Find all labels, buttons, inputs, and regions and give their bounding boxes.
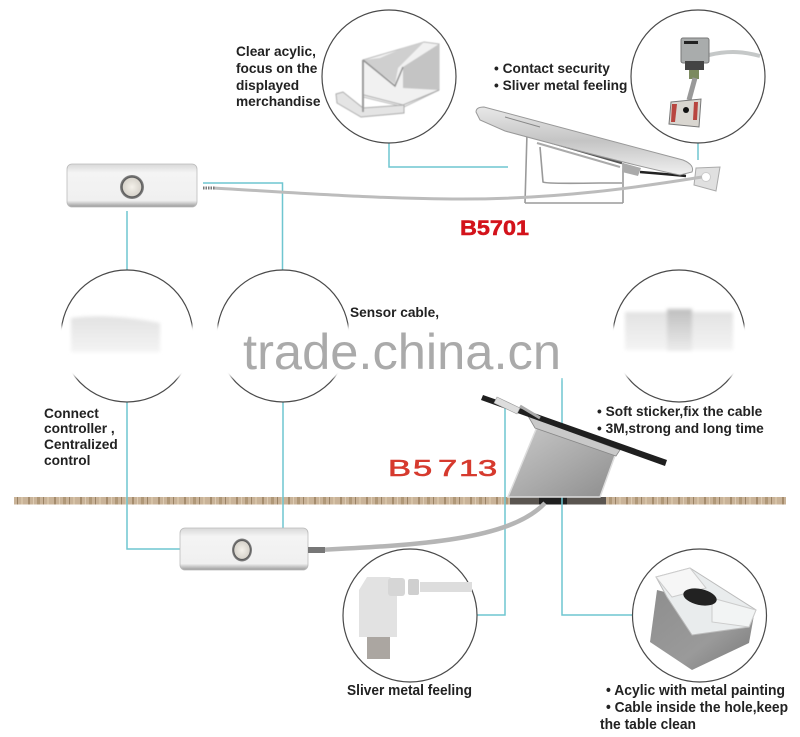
- circle: clear acrylic holder: [322, 10, 456, 143]
- label: clear acrylic: merchandise: [236, 94, 321, 109]
- label: contact security: • Contact security: [494, 61, 610, 76]
- label: connect controller: control: [44, 453, 90, 468]
- model label B5713: B5713: [388, 456, 497, 481]
- phone on acrylic stand B5701: [476, 107, 720, 203]
- circle: sensor cable detail: [217, 270, 349, 402]
- watermark: trade.china.cn: [243, 324, 561, 380]
- label: connect controller: Centralized: [44, 437, 118, 452]
- circle: contact security sensor: [631, 10, 765, 143]
- circle: L-shaped metal connector: [343, 549, 477, 682]
- label: contact security: [494, 61, 627, 93]
- model label B5701: B5701: [460, 217, 529, 240]
- label: connect controller: [44, 406, 118, 468]
- table surface: [14, 497, 786, 504]
- controller top: [67, 164, 215, 207]
- tablet stand B5713: [481, 395, 667, 497]
- ghost: controller in circle: [71, 316, 160, 352]
- label: contact security: • Sliver metal feeling: [494, 78, 627, 93]
- circle: soft sticker detail: [613, 270, 745, 402]
- label: clear acrylic: displayed: [236, 78, 299, 93]
- ghost: sticker in circle: [625, 309, 733, 351]
- label: sensor cable: Sensor cable,: [350, 305, 439, 320]
- circle: acrylic metal block: [632, 549, 766, 682]
- label: clear acrylic: focus on the: [236, 61, 318, 76]
- label: soft sticker: [597, 404, 764, 436]
- label: connect controller: Connect: [44, 406, 99, 421]
- label: acrylic with metal painting: • Acylic with metal painting: [606, 682, 785, 699]
- label: sliver metal feeling: Sliver metal feeling: [347, 682, 472, 699]
- label: clear acrylic: Clear acylic,: [236, 44, 316, 59]
- teal connector lines: [127, 143, 698, 615]
- cable to B5713: [318, 503, 545, 550]
- cable to B5701: [213, 177, 702, 199]
- label: clear acrylic: [236, 44, 321, 109]
- label: acrylic with metal painting: • Cable inside the hole,keep: [606, 699, 788, 716]
- controller bottom: [180, 528, 325, 570]
- blurred white band over circles: [40, 326, 760, 377]
- label: connect controller: controller ,: [44, 421, 115, 436]
- circle: controller detail: [61, 270, 193, 402]
- label: acrylic with metal painting: [600, 682, 788, 733]
- label: acrylic with metal painting: the table clean: [600, 716, 696, 733]
- label: soft sticker: • Soft sticker,fix the cable: [597, 404, 763, 419]
- label: soft sticker: • 3M,strong and long time: [597, 421, 764, 436]
